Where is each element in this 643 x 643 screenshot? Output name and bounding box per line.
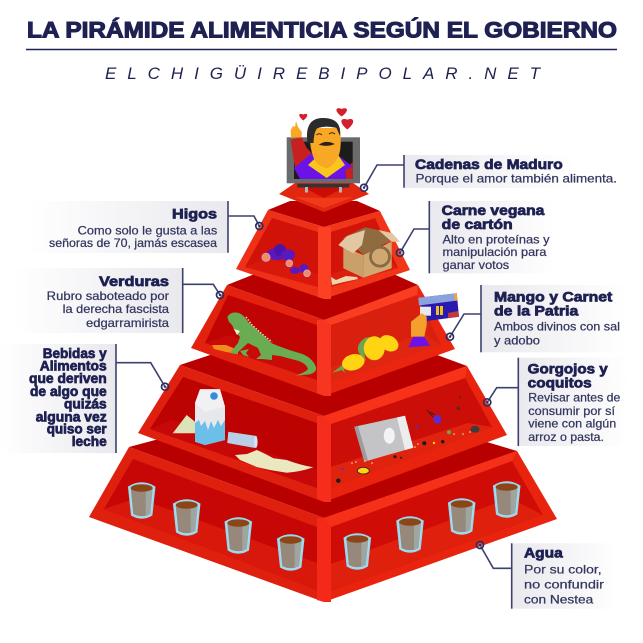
- text: carne: ganar votos: [442, 258, 509, 272]
- heading: bebidas y alimentos: quiso ser: [47, 420, 107, 436]
- tier 3: verduras y mango: [191, 268, 455, 396]
- tier 4: bebidas y gorgojos: [138, 345, 507, 502]
- text: higos: señoras de 70, jamás escasea: [49, 236, 217, 250]
- panel: higos: [28, 201, 263, 253]
- heading: bebidas y alimentos: leche: [72, 433, 107, 449]
- text: agua: con Nestea: [524, 592, 594, 606]
- panel: bebidas y alimentos: [0, 344, 168, 453]
- text: higos: Como solo le gusta a las: [78, 224, 217, 238]
- icon: caja de cartón: [331, 227, 400, 285]
- heading: carne: [442, 202, 545, 232]
- icon: carnet de la patria: [408, 293, 459, 347]
- text: verduras: Rubro saboteado por: [47, 289, 169, 303]
- panel: agua: [476, 542, 620, 609]
- heading: gorgojos: coquitos: [528, 374, 592, 390]
- icon: mangos: [332, 332, 401, 374]
- heading: carne: de cartón: [442, 216, 513, 232]
- connector: agua: [476, 542, 512, 609]
- heading: agua: Agua: [524, 544, 563, 560]
- text: carne: manipulación para: [442, 245, 547, 259]
- connector: carne: [396, 201, 429, 273]
- panel: gorgojos y coquitos: [484, 358, 628, 446]
- text: gorgojos: consumir por sí: [528, 404, 616, 418]
- text: gorgojos: viene con algún: [528, 417, 616, 431]
- heading: gorgojos: Gorgojos y: [528, 360, 608, 376]
- heading: mango: [494, 289, 613, 319]
- heading: bebidas y alimentos: que deriven: [29, 370, 107, 386]
- icon: Maduro en televisor: [287, 118, 360, 192]
- text: gorgojos: [528, 391, 621, 444]
- connector: mango: [446, 285, 481, 352]
- connector: cadenas: [360, 155, 404, 191]
- heading: higos: Higos: [172, 206, 217, 222]
- text: carne: Alto en proteínas y: [442, 232, 550, 246]
- connector: gorgojos: [484, 358, 518, 446]
- text: carne: [442, 232, 550, 272]
- text: verduras: edgarramirista: [86, 316, 169, 330]
- icon: leche y queso: [173, 389, 313, 473]
- text: verduras: la derecha fascista: [63, 302, 169, 316]
- heading: verduras: Verduras: [99, 273, 169, 289]
- connector: higos: [228, 201, 263, 253]
- heading: bebidas y alimentos: Alimentos: [40, 358, 107, 374]
- tier 2: higos y carne: [236, 201, 410, 299]
- heading: bebidas y alimentos: de algo que: [30, 383, 107, 399]
- text: verduras: [47, 289, 169, 330]
- icon: corazones: [299, 108, 353, 130]
- panel: cadenas de maduro: [360, 155, 617, 191]
- text: agua: [524, 562, 604, 606]
- heading: bebidas y alimentos: alguna vez: [36, 408, 107, 424]
- tier 1: cima: [279, 183, 369, 212]
- icon: higos: [262, 244, 310, 277]
- text: gorgojos: Revisar antes de: [528, 391, 621, 405]
- heading: cadenas: Cadenas de Maduro: [415, 156, 563, 172]
- heading: mango: de la Patria: [494, 303, 579, 319]
- panel: mango y carnet: [446, 285, 626, 352]
- heading: carne: Carne vegana: [442, 202, 545, 218]
- heading: bebidas y alimentos: [29, 345, 107, 449]
- panel: verduras: [15, 268, 224, 333]
- heading: bebidas y alimentos: Bebidas y: [43, 345, 107, 361]
- title: LA PIRÁMIDE ALIMENTICIA SEGÚN EL GOBIERNO: [27, 18, 617, 42]
- connector: verduras: [183, 268, 224, 333]
- text: agua: Por su color,: [524, 562, 602, 576]
- icon: vasos de agua turbia: [129, 482, 520, 570]
- connector: bebidas: [116, 344, 168, 453]
- text: higos: [49, 224, 217, 250]
- text: mango: [494, 320, 620, 347]
- pyramid: [89, 183, 557, 602]
- heading: mango: Mango y Carnet: [494, 289, 613, 305]
- text: gorgojos: arroz o pasta.: [528, 430, 604, 444]
- text: cadenas: Porque el amor también alimenta.: [416, 172, 617, 186]
- text: mango: Ambos divinos con sal: [494, 320, 620, 334]
- heading: bebidas y alimentos: quizás: [64, 396, 107, 412]
- text: agua: no confundir: [524, 577, 604, 591]
- heading: gorgojos: [528, 360, 608, 390]
- icon: paquete con gorgojos: [336, 396, 480, 483]
- tier 5: agua: [89, 428, 557, 602]
- icon: iguana: [212, 312, 316, 376]
- panel: carne vegana: [396, 201, 555, 273]
- text: mango: y adobo: [494, 333, 540, 347]
- subtitle: ELCHIGÜIREBIPOLAR.NET: [105, 64, 542, 83]
